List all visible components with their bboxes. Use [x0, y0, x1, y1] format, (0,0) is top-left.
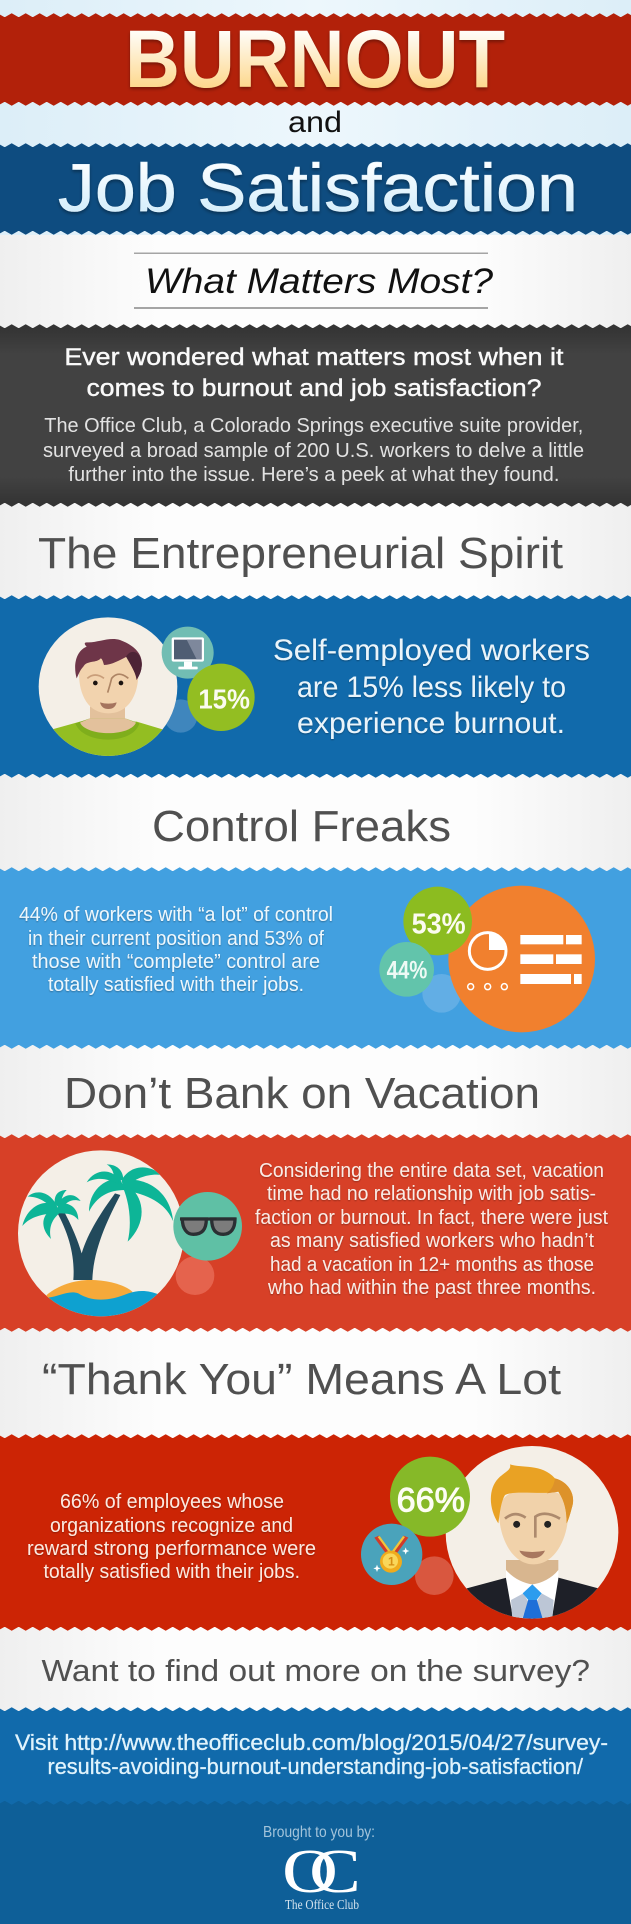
heading: the entrepreneurial spirit: The Entrepreneurial Spirit — [38, 529, 563, 578]
illustration: orange chart badge with 53% and 44% — [379, 886, 595, 1032]
heading: control freaks: Control Freaks — [152, 802, 451, 851]
text: recognition statistic: reward strong performance were — [27, 1538, 316, 1560]
illustration: palm island with sunglasses — [18, 1150, 242, 1322]
intro body text — [43, 415, 584, 486]
panel: control freaks — [0, 867, 631, 1049]
word: and: and — [288, 106, 342, 139]
stat: 44%: 44% — [387, 956, 427, 984]
text: control statistics — [19, 904, 333, 996]
intro body text: surveyed a broad sample of 200 U.S. workers to delve a little — [43, 440, 584, 462]
footer background — [0, 1798, 631, 1924]
text: self-employed workers: Self-employed workers — [273, 634, 590, 667]
subtitle: what matters most: What Matters Most? — [145, 262, 494, 301]
logo: the office club monogram: C — [309, 1838, 361, 1906]
text: vacation findings: faction or burnout. In fact, there were just — [255, 1207, 608, 1229]
title: job satisfaction: Job Satisfaction — [58, 150, 578, 226]
text: recognition statistic — [27, 1491, 316, 1583]
intro heading: comes to burnout and job satisfaction? — [86, 375, 542, 402]
text: survey url: results-avoiding-burnout-understanding-job-satisfaction/ — [48, 1754, 584, 1779]
logo: the office club monogram: O — [282, 1838, 338, 1906]
text: vacation findings: Considering the entire data set, vacation — [259, 1160, 604, 1182]
text: survey url — [15, 1730, 608, 1779]
text: recognition statistic: totally satisfied with their jobs. — [44, 1561, 300, 1583]
intro body text: The Office Club, a Colorado Springs executive suite provider, — [44, 415, 583, 437]
panel: intro — [0, 324, 631, 507]
text: control statistics: in their current position and 53% of — [28, 928, 324, 950]
footer credit — [263, 1824, 375, 1913]
text: recognition statistic: 66% of employees whose — [60, 1491, 284, 1513]
panel: thank you — [0, 1434, 631, 1631]
heading: thank you means a lot: “Thank You” Means A Lot — [42, 1355, 561, 1404]
icon: medal: 1 — [388, 1555, 395, 1569]
text: control statistics: those with “complete” control are — [32, 951, 320, 973]
panel: survey link — [0, 1707, 631, 1805]
text: vacation findings: had a vacation in 12+ months as those — [270, 1254, 594, 1276]
title: burnout: BURNOUT — [125, 14, 505, 105]
text: self-employed workers: are 15% less likely to — [297, 671, 566, 704]
text: survey url: Visit http://www.theofficeclub.com/blog/2015/04/27/survey- — [15, 1730, 608, 1755]
text: vacation findings: who had within the past three months. — [267, 1277, 596, 1299]
panel: vacation — [0, 1134, 631, 1332]
heading: don't bank on vacation: Don’t Bank on Vacation — [64, 1069, 540, 1118]
text: self-employed workers — [273, 634, 590, 740]
stat: 66%: 66% — [397, 1482, 465, 1520]
text: vacation findings: as many satisfied workers who hadn’t — [270, 1230, 594, 1252]
text: vacation findings: time had no relationship with job satis- — [267, 1183, 596, 1205]
text: brought to you by: Brought to you by: — [263, 1824, 375, 1841]
text: self-employed workers: experience burnout. — [297, 707, 565, 740]
logo: the office club monogram — [282, 1838, 361, 1906]
text: the office club: The Office Club — [285, 1898, 359, 1913]
intro body text: further into the issue. Here’s a peek at what they found. — [68, 464, 559, 486]
text: control statistics: totally satisfied with their jobs. — [48, 974, 304, 996]
intro heading: Ever wondered what matters most when it — [64, 344, 564, 371]
illustration: young worker with monitor and 15% badge — [39, 617, 255, 760]
banner: job satisfaction — [0, 143, 631, 235]
text: vacation findings — [255, 1160, 608, 1299]
stat: 15%: 15% — [198, 683, 250, 714]
icon: medal — [373, 1536, 409, 1573]
text: recognition statistic: organizations recognize and — [50, 1515, 293, 1537]
text: control statistics: 44% of workers with “a lot” of control — [19, 904, 333, 926]
illustration: businessman with medal and 66% badge — [361, 1446, 618, 1622]
intro heading — [64, 344, 564, 402]
heading: want to find out more: Want to find out more on the survey? — [42, 1653, 590, 1688]
panel: entrepreneurial spirit — [0, 595, 631, 778]
banner: burnout — [0, 13, 631, 106]
stat: 53%: 53% — [412, 908, 466, 940]
